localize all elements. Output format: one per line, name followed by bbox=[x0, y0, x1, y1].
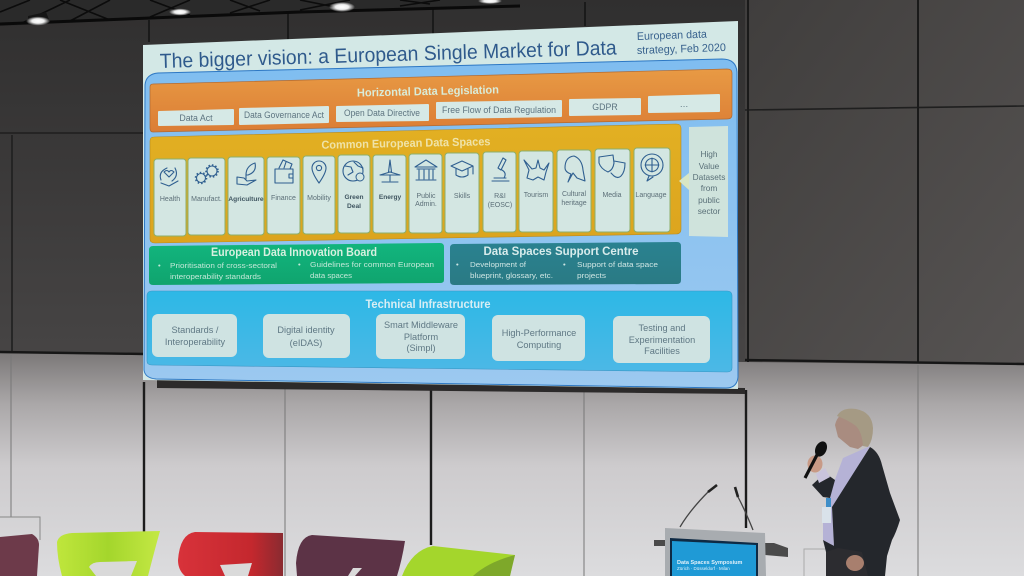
tile: Manufact.: Manufact. bbox=[191, 196, 222, 203]
tile: Tourism bbox=[519, 151, 553, 232]
bullets: support centre tasks: projects bbox=[577, 271, 606, 280]
panel: High Value Datasets from public sector: High bbox=[700, 149, 718, 159]
bullets: support centre tasks bbox=[456, 260, 658, 280]
bullets: board tasks: • bbox=[298, 260, 301, 269]
tile: R&I (EOSC): R&I bbox=[494, 193, 506, 200]
tile: Green Deal: Deal bbox=[347, 203, 361, 210]
tile: Finance: Finance bbox=[271, 195, 296, 202]
tile: Energy: Energy bbox=[379, 194, 402, 201]
box: Testing and Experimentation Facilities: Facilities bbox=[644, 346, 680, 356]
lectern screen text: Data Spaces Symposium bbox=[677, 560, 743, 566]
chair cut-out: red bbox=[220, 563, 252, 576]
bullets: support centre tasks: blueprint, glossary, etc. bbox=[470, 271, 553, 280]
slide source note bbox=[637, 29, 726, 57]
heading: Data Spaces Support Centre: Data Spaces Support Centre bbox=[484, 246, 638, 258]
chair: lime bbox=[57, 531, 160, 576]
box: Digital identity (eIDAS) bbox=[263, 314, 350, 358]
panel: High Value Datasets from public sector: sector bbox=[698, 206, 721, 216]
shirt bbox=[823, 446, 870, 546]
trousers bbox=[826, 540, 885, 576]
box: Standards / Interoperability bbox=[152, 314, 237, 357]
hair bbox=[837, 409, 873, 447]
bullets: board tasks: Prioritisation of cross-sectoral bbox=[170, 261, 277, 270]
box: Smart Middleware Platform (Simpl): (Simpl) bbox=[406, 343, 436, 353]
box: Smart Middleware Platform (Simpl): Platform bbox=[404, 332, 438, 342]
badge bbox=[822, 498, 831, 523]
tile: Green Deal bbox=[338, 155, 370, 233]
legislation item: GDPR: GDPR bbox=[592, 102, 618, 112]
legislation item: Open Data Directive: Open Data Directive bbox=[344, 108, 420, 118]
tile: Energy bbox=[373, 155, 406, 233]
box: Standards / Interoperability: Interoperability bbox=[165, 337, 226, 347]
cuff bbox=[816, 468, 830, 483]
box: High-Performance Computing: Computing bbox=[517, 340, 561, 350]
chair cut-out: lime bbox=[89, 561, 137, 576]
legislation item: Free Flow of Data Regulation bbox=[437, 101, 561, 118]
tile: Public Admin. bbox=[409, 154, 442, 233]
box: Digital identity (eIDAS): (eIDAS) bbox=[290, 338, 322, 348]
lectern shelf bbox=[654, 540, 788, 557]
bullets: board tasks: data spaces bbox=[310, 271, 352, 280]
arrow: datasets into data spaces bbox=[679, 173, 689, 190]
panel: High Value Datasets from public sector: from bbox=[701, 183, 717, 193]
tile: Public Admin.: Public bbox=[416, 193, 436, 200]
background: light lower wall bbox=[0, 352, 1024, 576]
panel: Horizontal Data Legislation bbox=[150, 69, 732, 132]
heading: Horizontal Data Legislation: Horizontal Data Legislation bbox=[357, 84, 499, 100]
tile: Language bbox=[634, 148, 670, 232]
tile: Mobility bbox=[303, 156, 335, 234]
tile: Manufact. bbox=[188, 158, 225, 235]
panel: Technical Infrastructure bbox=[147, 291, 732, 372]
box: Testing and Experimentation Facilities bbox=[613, 316, 710, 363]
microphone bbox=[805, 453, 818, 478]
panel: High Value Datasets from public sector: public bbox=[698, 195, 720, 205]
lectern with microphones bbox=[654, 485, 788, 576]
heading: Technical Infrastructure: Technical Infrastructure bbox=[366, 299, 490, 311]
bullets: board tasks: • bbox=[158, 261, 161, 270]
box: Digital identity (eIDAS): Digital identity bbox=[277, 325, 335, 335]
slide source note: European data bbox=[637, 29, 708, 43]
bullets: board tasks bbox=[158, 260, 434, 281]
chair shading: lime right bbox=[473, 555, 515, 576]
bullets: board tasks: Guidelines for common European bbox=[310, 260, 434, 269]
tile: Agriculture bbox=[228, 157, 264, 235]
box: High-Performance Computing bbox=[492, 315, 585, 361]
projection shadow bbox=[157, 380, 745, 394]
blue background panel bbox=[144, 59, 738, 388]
chair: red bbox=[178, 532, 283, 576]
tile: Media: Media bbox=[602, 192, 622, 199]
panel: High Value Datasets from public sector bbox=[679, 126, 728, 237]
tile: Agriculture: Agriculture bbox=[228, 196, 264, 203]
bullets: support centre tasks: • bbox=[456, 260, 459, 269]
chair cut-out: plum centre bbox=[348, 568, 362, 576]
tile: Health bbox=[154, 159, 186, 236]
jacket bbox=[823, 447, 900, 576]
chair: plum left bbox=[0, 534, 39, 576]
tile: Cultural heritage: Cultural bbox=[562, 191, 587, 198]
lectern screen text bbox=[677, 560, 743, 571]
tile: Skills bbox=[445, 153, 479, 233]
tile: Mobility: Mobility bbox=[307, 195, 331, 202]
legislation item: ellipsis bbox=[649, 95, 719, 112]
tile: Green Deal: Green bbox=[344, 194, 364, 201]
legislation item: Data Act: Data Act bbox=[179, 113, 213, 123]
tile: Finance bbox=[267, 157, 300, 234]
legislation item: Data Act bbox=[159, 110, 233, 125]
bullets: support centre tasks: • bbox=[563, 260, 566, 269]
head bbox=[835, 411, 868, 449]
tile: Skills: Skills bbox=[454, 193, 471, 200]
chair: lime right bbox=[402, 546, 515, 576]
bullets: support centre tasks: Support of data space bbox=[577, 260, 658, 269]
panel: European Data Innovation Board bbox=[149, 243, 444, 285]
tile: Tourism: Tourism bbox=[524, 192, 548, 199]
panel: Data Spaces Support Centre bbox=[450, 242, 681, 285]
tile: Public Admin.: Admin. bbox=[415, 201, 437, 208]
tile: Language: Language bbox=[635, 192, 667, 199]
box: Testing and Experimentation Facilities: Testing and bbox=[638, 323, 686, 333]
legislation item: Data Governance Act: Data Governance Act bbox=[244, 110, 325, 120]
box: Smart Middleware Platform (Simpl) bbox=[376, 314, 465, 359]
hand bbox=[808, 456, 822, 472]
tile: Cultural heritage: heritage bbox=[561, 200, 587, 207]
legislation item: Free Flow of Data Regulation: Free Flow of Data Regulation bbox=[442, 105, 556, 115]
slide title: The bigger vision: a European Single Market for Data bbox=[159, 36, 618, 73]
arm bbox=[812, 473, 835, 498]
heading: Common European Data Spaces: Common European Data Spaces bbox=[321, 136, 491, 152]
tile: Health: Health bbox=[160, 196, 180, 203]
legislation item: ellipsis: … bbox=[680, 99, 688, 109]
tile: Cultural heritage bbox=[557, 150, 591, 232]
slide: The bigger vision bbox=[143, 21, 738, 389]
chair: plum centre bbox=[296, 535, 405, 576]
tile: R&I (EOSC): (EOSC) bbox=[488, 202, 512, 209]
speaker with microphone bbox=[805, 409, 900, 576]
panel: High Value Datasets from public sector: Value bbox=[699, 161, 720, 171]
legislation item: GDPR bbox=[570, 99, 640, 115]
bullets: support centre tasks: Development of bbox=[470, 260, 527, 269]
box: High-Performance Computing: High-Performance bbox=[502, 328, 576, 338]
slide source note: strategy, Feb 2020 bbox=[637, 42, 726, 57]
background: dark upper wall bbox=[0, 0, 1024, 365]
ceiling truss and stage lights bbox=[0, 0, 520, 26]
legislation item: Open Data Directive bbox=[337, 105, 428, 121]
bullets: board tasks: interoperability standards bbox=[170, 272, 261, 281]
tile: Media bbox=[595, 149, 630, 232]
legislation item: Data Governance Act bbox=[240, 107, 328, 124]
tile: R&I (EOSC) bbox=[483, 152, 516, 232]
hand on pocket bbox=[846, 555, 864, 571]
box: Smart Middleware Platform (Simpl): Smart Middleware bbox=[384, 320, 458, 330]
panel: High Value Datasets from public sector: Datasets bbox=[693, 172, 725, 182]
heading: European Data Innovation Board: European Data Innovation Board bbox=[211, 247, 377, 259]
panel: Common European Data Spaces bbox=[150, 124, 681, 243]
microphones bbox=[680, 485, 753, 530]
box: Standards / Interoperability: Standards / bbox=[172, 325, 219, 335]
box: Testing and Experimentation Facilities: Experimentation bbox=[629, 335, 695, 345]
lectern screen text: Zürich · Düsseldorf · Milan bbox=[677, 566, 730, 571]
chairs row bbox=[0, 531, 515, 576]
